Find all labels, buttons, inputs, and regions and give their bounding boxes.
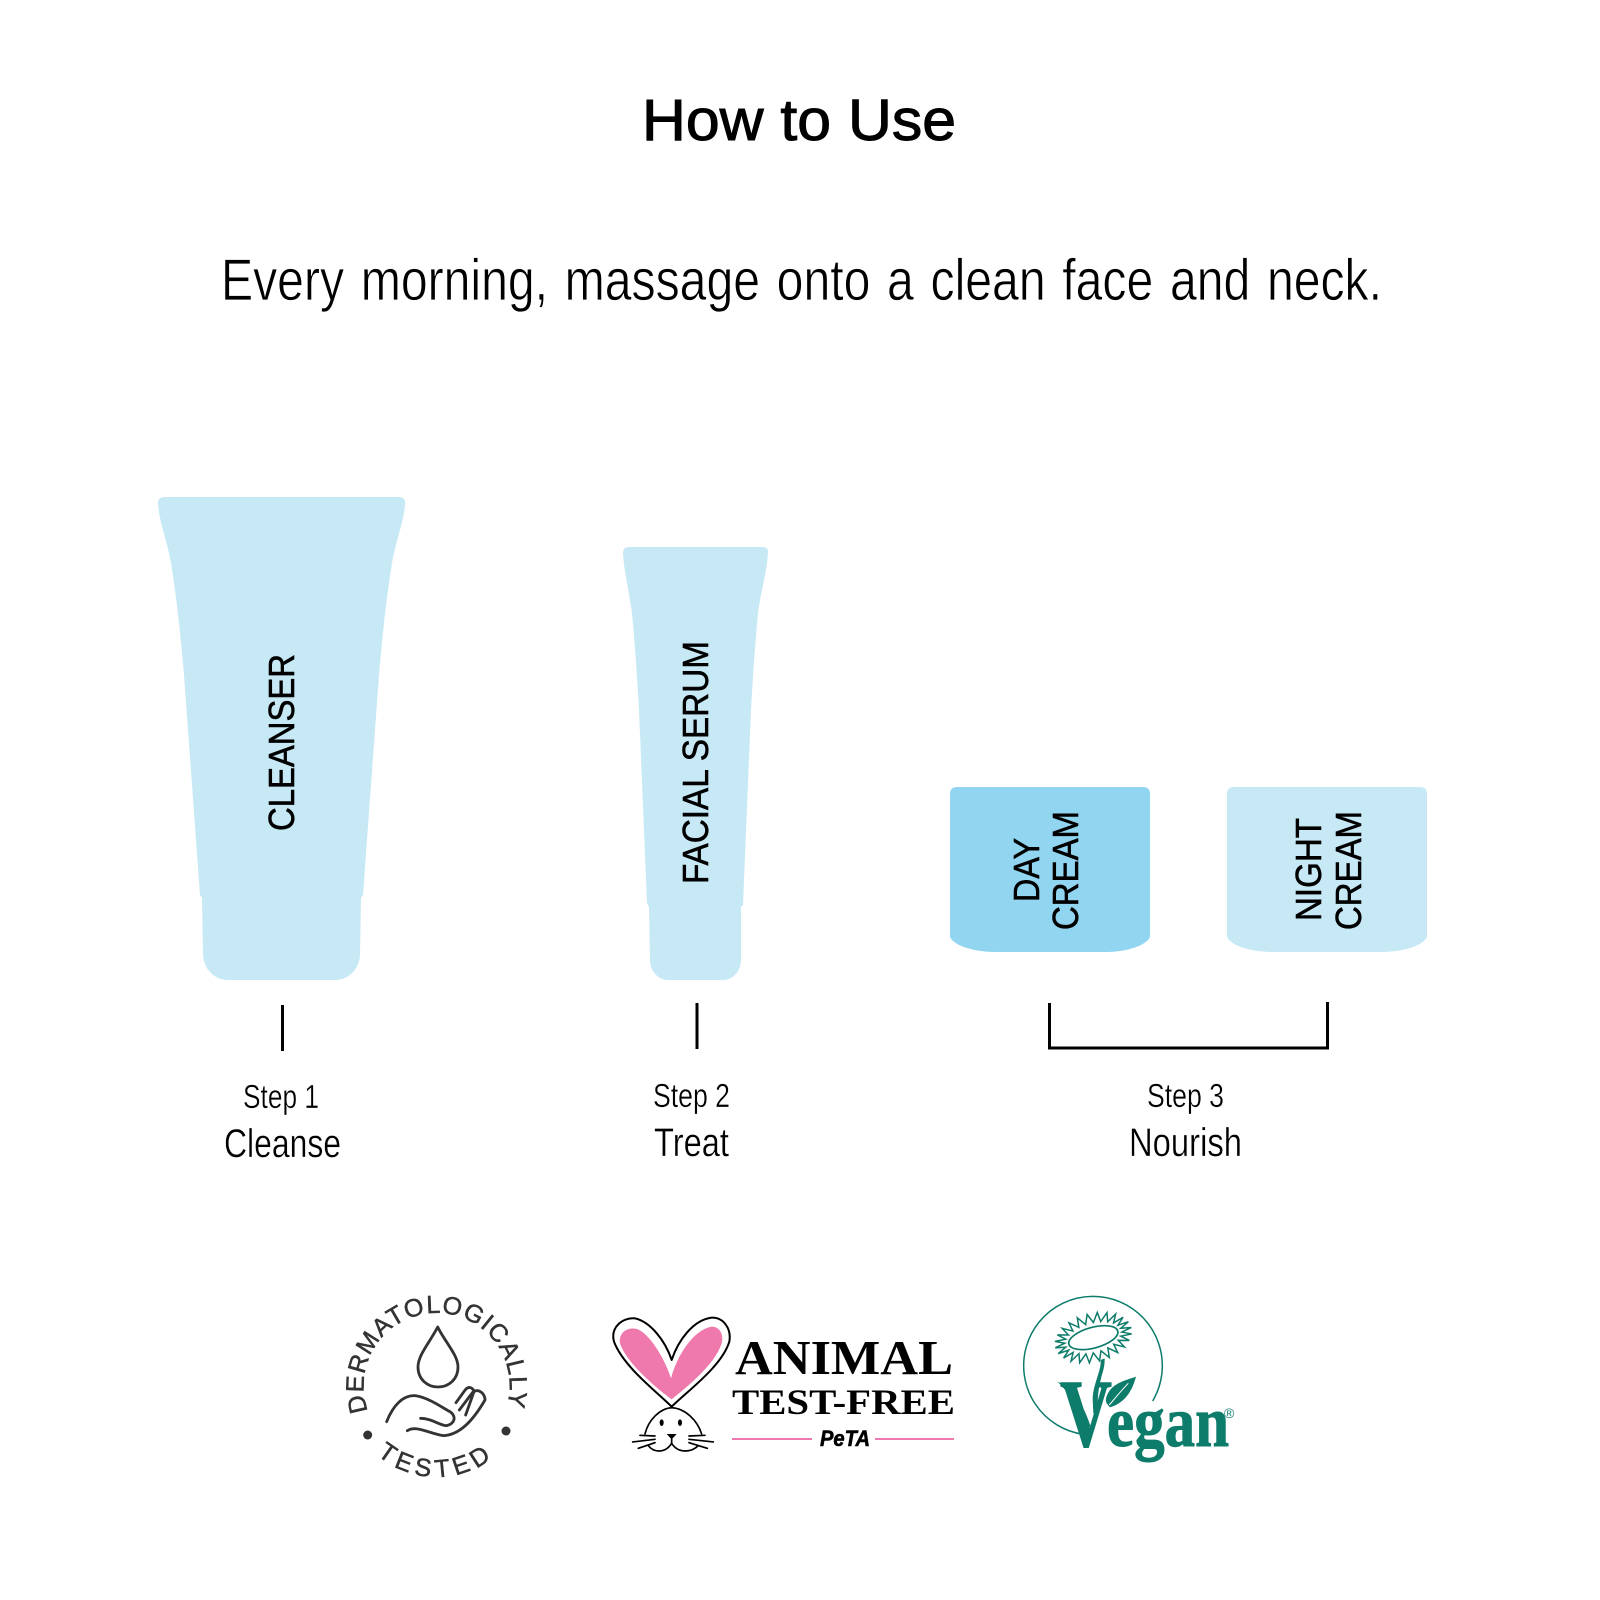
badge wording	[732, 1330, 955, 1451]
label: night cream: NIGHT	[1288, 818, 1329, 921]
step 2 caption: Step 2	[653, 1077, 730, 1114]
step 3 caption: Step 3	[1147, 1077, 1224, 1114]
label: day cream	[1006, 811, 1086, 930]
step 2 caption: Treat	[654, 1121, 729, 1165]
product: cleanser tube	[158, 497, 405, 980]
label: night cream: CREAM	[1328, 811, 1369, 930]
registered mark: ®	[1224, 1405, 1235, 1421]
subtitle instruction: Every morning, massage onto a clean face and neck.	[221, 248, 1382, 313]
label: facial serum: FACIAL SERUM	[675, 641, 716, 884]
step 1 caption: Cleanse	[224, 1122, 341, 1166]
title: How to Use	[642, 88, 956, 153]
step 1 caption	[224, 1078, 341, 1166]
badge wording: TEST-FREE	[732, 1382, 955, 1422]
vegan wordmark: V	[1060, 1360, 1112, 1467]
badge: animal test-free peta	[613, 1318, 955, 1451]
step 3 caption	[1129, 1077, 1242, 1165]
label: cleanser: CLEANSER	[261, 654, 302, 831]
step 3 caption: Nourish	[1129, 1121, 1242, 1165]
label: day cream: DAY	[1006, 838, 1047, 902]
step 1 caption: Step 1	[243, 1078, 319, 1115]
product: night cream jar	[1227, 787, 1427, 952]
badge: dermatologically tested: DERMATOLOGICALLY	[346, 1296, 528, 1414]
badge: dermatologically tested: TESTED	[382, 1441, 488, 1478]
badge wording: PeTA	[820, 1426, 870, 1451]
icon: water drop	[418, 1327, 458, 1387]
badge: vegan	[1024, 1296, 1235, 1467]
connector: step 2 tick	[696, 1003, 698, 1049]
step 2 caption	[653, 1077, 730, 1165]
product: facial serum tube	[623, 547, 768, 980]
connector: step 1 tick	[281, 1005, 284, 1051]
vegan wordmark: egan	[1107, 1382, 1229, 1462]
connector: step 3 bracket	[1050, 1002, 1328, 1048]
icon: bunny	[613, 1318, 730, 1451]
label: night cream	[1288, 811, 1369, 930]
label: day cream: CREAM	[1045, 811, 1086, 930]
icon: open hand	[387, 1387, 485, 1436]
badge wording: ANIMAL	[735, 1330, 953, 1385]
badge: dermatologically tested	[346, 1296, 528, 1478]
icon: sunflower in circle	[1024, 1296, 1162, 1434]
product: day cream jar	[950, 787, 1150, 952]
